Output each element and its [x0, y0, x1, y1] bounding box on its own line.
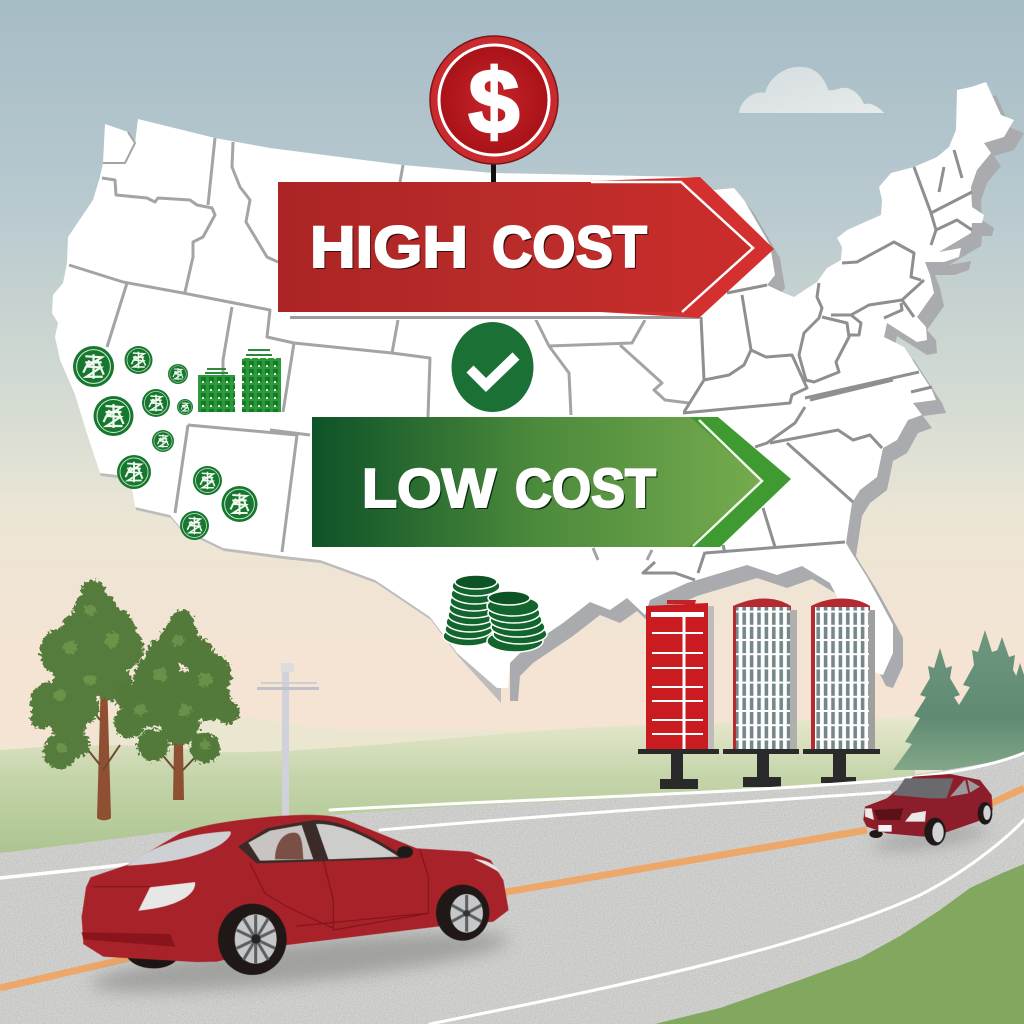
label: high cost: COST [492, 215, 647, 280]
grille [873, 808, 903, 820]
label: high cost [310, 215, 649, 282]
mirror [397, 846, 413, 858]
icon: cloud [739, 67, 884, 113]
icon: coin [222, 486, 258, 522]
icon: pine tree [893, 648, 987, 770]
icon: green building tall [242, 350, 281, 412]
map of the United States [52, 82, 1024, 703]
red high cost arrow [278, 177, 774, 320]
icon: tree right [114, 610, 240, 800]
label: high cost: COST [494, 217, 649, 282]
map shadow east [510, 95, 1024, 701]
icon: coin [152, 430, 174, 452]
headlights [865, 808, 926, 822]
icon: coin [94, 396, 134, 436]
road [0, 755, 1024, 1024]
label: low cost: COST [517, 459, 658, 521]
stacks of coins [443, 575, 547, 652]
label: high cost: HIGH [312, 217, 470, 282]
skyscrapers [638, 598, 880, 789]
icon: green check badge [452, 322, 534, 412]
label: low cost: LOW [362, 457, 496, 519]
windshield [893, 778, 953, 798]
front wheel [924, 818, 946, 846]
icon: red building [638, 600, 719, 789]
icon: dollar sign with post: $ [468, 51, 520, 153]
icon: pine tree [975, 637, 1024, 775]
icon: coin [193, 466, 222, 495]
tail light [138, 882, 195, 911]
label: low cost [362, 457, 658, 521]
icon: coin [168, 364, 188, 384]
icon: gray building [723, 598, 799, 787]
icon: coin [177, 399, 193, 415]
icon: dollar sign with post [430, 36, 558, 184]
body details [93, 850, 428, 930]
field and hill [0, 717, 1024, 860]
icon: pine tree [1000, 663, 1024, 775]
label: low cost: COST [515, 457, 656, 519]
head light [474, 859, 500, 873]
large red car [82, 815, 509, 975]
icon: coin [142, 389, 170, 417]
roadside grass [655, 864, 1024, 1024]
label: high cost: HIGH [310, 215, 468, 280]
front wheel [436, 885, 489, 941]
rear window [127, 831, 231, 866]
coins and green buildings over the west [73, 346, 281, 540]
icon: gray building [803, 598, 880, 783]
small red car [863, 774, 993, 846]
green low cost arrow [312, 417, 791, 547]
icon: tree left [30, 580, 144, 820]
side windows [238, 820, 403, 863]
icon: pine tree [940, 630, 1024, 775]
icon: coin [117, 455, 151, 489]
rear wheel [978, 802, 992, 825]
icon: coin [124, 346, 152, 374]
rear wheel [218, 904, 287, 975]
icon: coin [180, 511, 209, 540]
car shadows on road [89, 822, 989, 1004]
state borders [69, 132, 972, 580]
label: low cost: LOW [364, 459, 498, 521]
icon: coin [73, 346, 114, 387]
icon: green building small [198, 369, 235, 412]
rear underbody tyre [127, 957, 177, 968]
map shadow west [61, 363, 501, 703]
icon: utility pole [257, 663, 319, 816]
side windows [950, 779, 980, 797]
map land [52, 82, 1014, 688]
road markings [0, 753, 1024, 1024]
icons: pine trees [893, 630, 1024, 775]
